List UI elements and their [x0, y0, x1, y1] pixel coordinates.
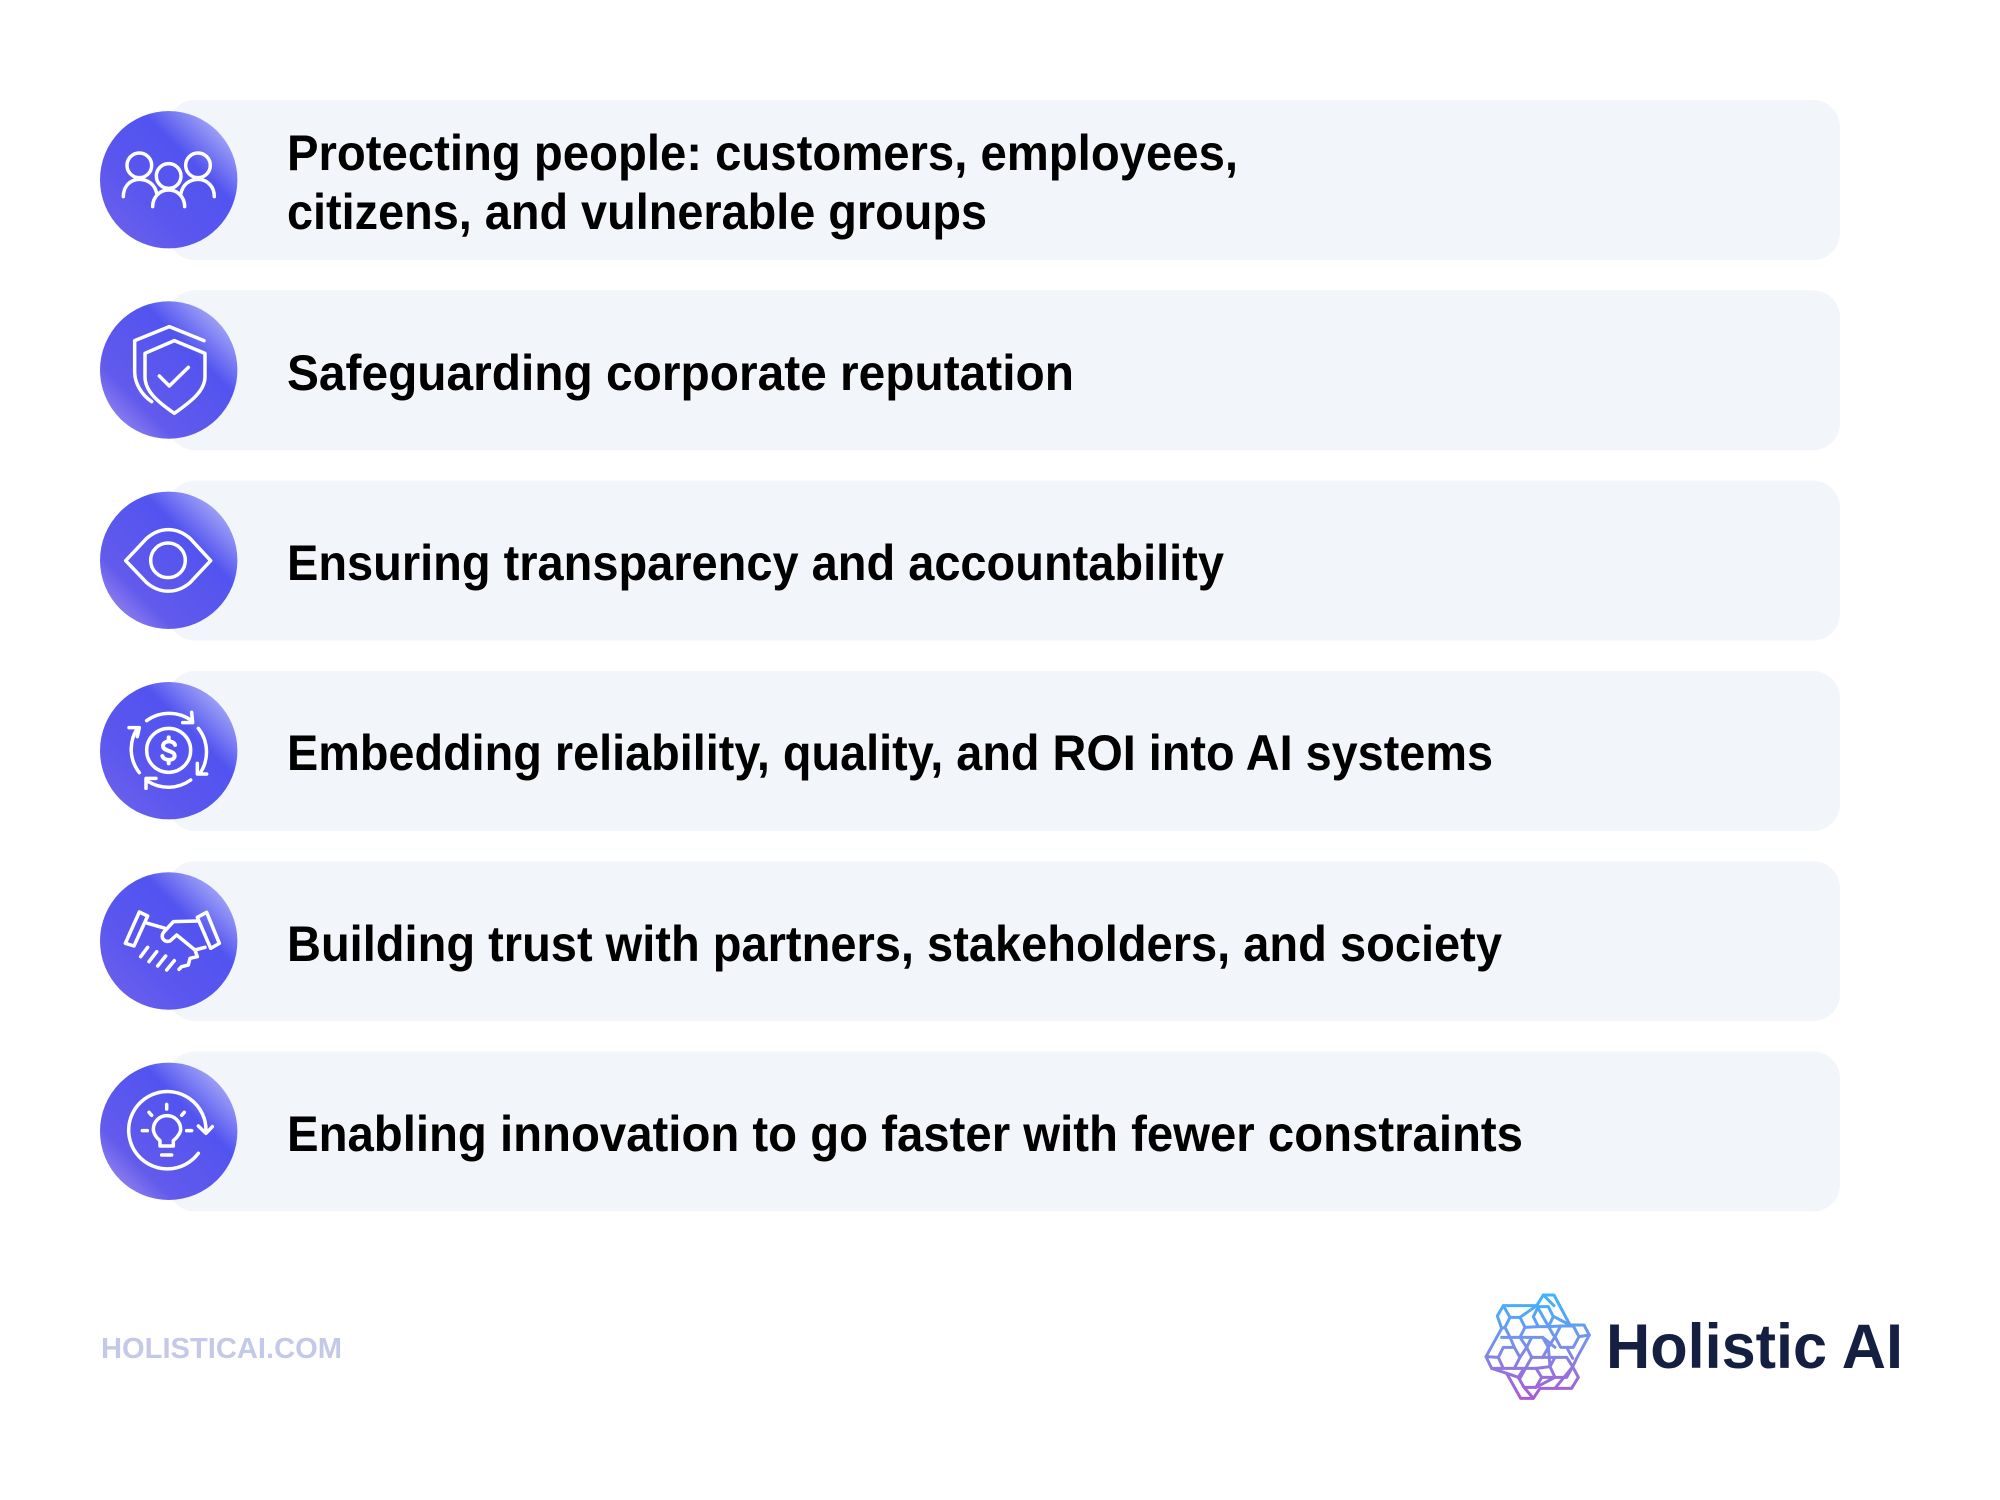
icon: light bulb cycle: [100, 1063, 237, 1200]
icon: shield: [100, 301, 237, 439]
logo: [1486, 1295, 1903, 1398]
logo mark: hexagon lattice: [1486, 1295, 1589, 1398]
text: protecting people: [287, 125, 1238, 240]
text: reliability: Embedding reliability, quality, and ROI into AI systems: [287, 725, 1493, 781]
card 6 background: [168, 1052, 1840, 1212]
row 5: trust: [100, 861, 1840, 1021]
card 5 background: [168, 861, 1840, 1021]
row 2: corporate reputation: [100, 290, 1840, 450]
text: transparency: Ensuring transparency and accountability: [287, 535, 1224, 591]
card 3 background: [168, 481, 1840, 641]
icon: handshake: [100, 872, 237, 1010]
row 4: reliability and ROI: [100, 671, 1840, 831]
text: safeguarding: Safeguarding corporate reputation: [287, 345, 1074, 401]
row 1: protecting people: [100, 100, 1840, 260]
card 4 background: [168, 671, 1840, 831]
text: innovation: Enabling innovation to go faster with fewer constraints: [287, 1106, 1523, 1162]
footer url: HOLISTICAI.COM: [101, 1333, 342, 1365]
icon: eye: [100, 492, 237, 629]
row 3: transparency: [100, 481, 1840, 641]
card 1 background: [168, 100, 1840, 260]
row 6: innovation: [100, 1052, 1840, 1212]
icon: people: [100, 111, 237, 248]
text: protecting people: citizens, and vulnerable groups: [287, 184, 987, 240]
text: protecting people: Protecting people: customers, employees,: [287, 125, 1238, 181]
card 2 background: [168, 290, 1840, 450]
logo wordmark: Holistic AI: [1606, 1312, 1903, 1382]
icon: dollar cycle: [100, 682, 237, 819]
text: trust: Building trust with partners, stakeholders, and society: [287, 916, 1502, 972]
